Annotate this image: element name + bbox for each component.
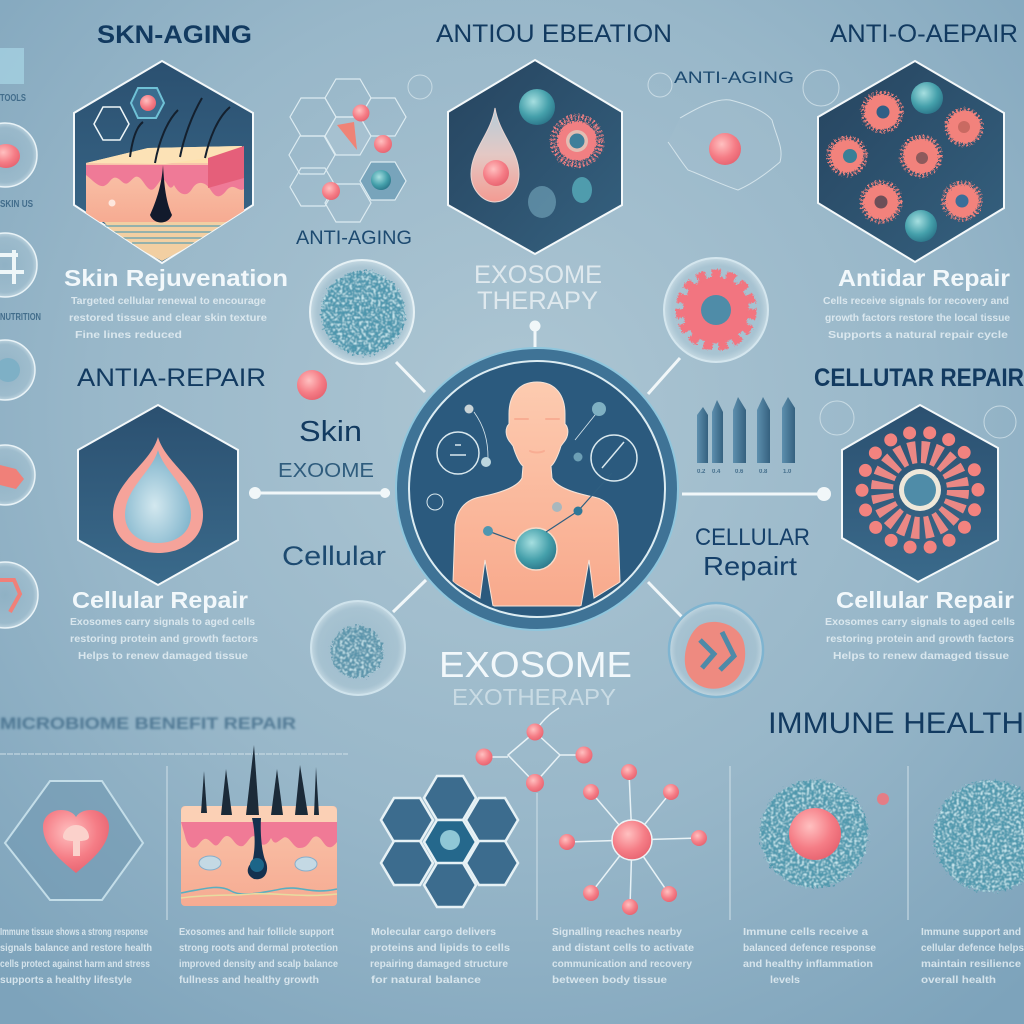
text block: bottom 5: levels (770, 974, 800, 986)
heading: immune health: IMMUNE HEALTH (768, 707, 1024, 740)
panel: small cell lower left (311, 601, 405, 695)
icon: immune cell with red core (760, 780, 889, 888)
heading: anti-oxidation: ANTIOU EBEATION (436, 20, 672, 48)
text block: skin rejuvenation: Fine lines reduced (75, 329, 182, 341)
vial labels: 1.0 (783, 469, 792, 475)
cell nuclei (843, 82, 970, 242)
text block: skin rejuvenation: Targeted cellular renewal to encourage (71, 295, 266, 307)
text block: antidar repair: growth factors restore the local tissue (825, 312, 1010, 324)
panel: heart icon (5, 781, 143, 900)
heading: antidar repair: Antidar Repair (838, 265, 1010, 291)
icon: water drop (113, 437, 203, 553)
vial labels: 0.2 (697, 469, 706, 475)
icon: immune cell teal (934, 780, 1024, 892)
floating bubbles (427, 410, 637, 510)
face (515, 419, 559, 452)
cellular label: Cellular (282, 541, 386, 571)
text block: cellular repair left: Exosomes carry signals to aged cells (70, 616, 255, 628)
icon: spiky cells (829, 93, 981, 221)
text block: bottom 4: between body tissue (552, 974, 667, 986)
heart (43, 810, 109, 873)
text block: bottom 1: cells protect against harm and stress (0, 958, 150, 970)
text labels left of centre (278, 370, 386, 571)
text block: bottom 3: Molecular cargo delivers (371, 926, 496, 938)
text block: bottom 1: signals balance and restore health (0, 942, 152, 954)
text block: bottom 2: strong roots and dermal protection (179, 942, 338, 954)
text block: cellular repair right (825, 616, 1015, 662)
vial labels (697, 469, 792, 475)
panel: central figure circle (396, 348, 678, 630)
icon: molecular star (559, 764, 707, 915)
panel: vials (697, 397, 795, 475)
heading: anti-repair top right: ANTI-O-AEPAIR (830, 20, 1018, 48)
icon: spiky red cell (553, 117, 601, 165)
heading: skin rejuvenation: Skin Rejuvenation (64, 265, 288, 291)
panel: left edge column: NUTRITION (0, 312, 41, 323)
icon: floating red ball (297, 370, 327, 400)
text block: antidar repair: Supports a natural repair cycle (828, 329, 1008, 341)
text block: bottom 6: Immune support and (921, 926, 1021, 938)
text block: bottom 1: supports a healthy lifestyle (0, 974, 132, 986)
panel: red squiggle lower right (669, 603, 763, 697)
text block: cellular repair left: Helps to renew damaged tissue (78, 650, 248, 662)
panel: spiky ring hexagon right (842, 405, 998, 582)
dividers (0, 754, 908, 920)
panel: left edge column: SKIN US (0, 199, 33, 210)
text block: bottom 3 (370, 926, 510, 986)
heading: cellular repair right: Cellular Repair (836, 587, 1014, 613)
panel: hexagon lattice (289, 79, 406, 222)
heading: anti-aging under lattice: ANTI-AGING (296, 228, 412, 249)
faint cells (572, 177, 592, 203)
icon: ring cell (862, 432, 978, 548)
heading: anti-repair left: ANTIA-REPAIR (77, 364, 266, 392)
heading: cellular repair centre-right (695, 524, 810, 581)
text block: antidar repair (823, 295, 1010, 341)
panel: left edge column: TOOLS (0, 93, 26, 104)
text block: cellular repair left (70, 616, 258, 662)
icon: skin cross-section (86, 146, 244, 261)
text block: bottom 6: maintain resilience (921, 958, 1021, 970)
skin label: Skin (299, 416, 362, 448)
vial labels: 0.8 (759, 469, 768, 475)
hexagon small outlines (94, 107, 129, 140)
faint ring icons (408, 70, 1016, 438)
panel: honeycomb (381, 776, 518, 907)
panel: red cell in glass circle (664, 258, 768, 362)
text block: bottom 3: for natural balance (371, 974, 481, 986)
text block: bottom 1 (0, 926, 152, 986)
text block: antidar repair: Cells receive signals for recovery and (823, 295, 1009, 307)
panel: droplet hexagon left (78, 405, 238, 585)
panel: cell cluster hexagon top right (818, 61, 1004, 262)
heading: blurred bottom left: MICROBIOME BENEFIT REPAIR (0, 714, 296, 733)
text block: bottom 4 (552, 926, 694, 986)
text block: bottom 6: overall health (921, 974, 996, 986)
cell in centre (440, 830, 460, 850)
icon: teal sphere (519, 89, 555, 125)
text block: bottom 2 (179, 926, 338, 986)
vial labels: 0.6 (735, 469, 744, 475)
icon: droplet (471, 108, 519, 202)
heading: small anti-aging: ANTI-AGING (674, 68, 794, 87)
text block: bottom 4: communication and recovery (552, 958, 692, 970)
hairs (201, 745, 319, 815)
text block: bottom 4: and distant cells to activate (552, 942, 694, 954)
heading: cellular repair centre-right: Repairt (703, 551, 798, 581)
text block: bottom 5 (743, 926, 876, 986)
text block: bottom 6 (921, 926, 1024, 986)
heading: exosome therapy top: THERAPY (477, 287, 598, 315)
heading: exosome therapy top (474, 261, 602, 315)
text block: bottom 2: improved density and scalp balance (179, 958, 338, 970)
text block: skin rejuvenation: restored tissue and clear skin texture (69, 312, 267, 324)
text block: bottom 2: fullness and healthy growth (179, 974, 319, 986)
icon: molecular diamond (476, 708, 592, 792)
text block: skin rejuvenation (69, 295, 267, 341)
human figure (453, 382, 620, 606)
panel: droplet hexagon top centre (448, 60, 622, 254)
icon: anti-aging glass cell (668, 100, 781, 190)
heading: exosome therapy lower: EXOSOME (439, 644, 632, 685)
text block: cellular repair right: Helps to renew damaged tissue (833, 650, 1009, 662)
text block: cellular repair right: restoring protein and growth factors (826, 633, 1014, 645)
text block: cellular repair left: restoring protein and growth factors (70, 633, 258, 645)
heading: exosome therapy lower (439, 644, 632, 710)
strata (181, 887, 337, 894)
text block: cellular repair right: Exosomes carry signals to aged cells (825, 616, 1015, 628)
exosome on chest (515, 528, 557, 570)
connectors (249, 320, 831, 617)
sebaceous glands (199, 856, 221, 870)
heading: skin aging: SKN-AGING (97, 21, 252, 49)
panel: left edge column (0, 48, 41, 628)
panel: teal cell in glass circle (310, 260, 414, 364)
text block: bottom 4: Signalling reaches nearby (552, 926, 682, 938)
heading: exosome therapy top: EXOSOME (474, 261, 602, 289)
text block: bottom 3: repairing damaged structure (370, 958, 508, 970)
panel: skin rejuvenation hexagon (74, 61, 253, 263)
panel: skin block bottom (181, 745, 337, 906)
hairs (130, 98, 230, 163)
exosome label: EXOOME (278, 460, 374, 482)
text block: bottom 5: Immune cells receive a (743, 926, 868, 938)
vial labels: 0.4 (712, 469, 721, 475)
text block: bottom 5: and healthy inflammation (743, 958, 873, 970)
text block: bottom 5: balanced defence response (743, 942, 876, 954)
text block: bottom 2: Exosomes and hair follicle support (179, 926, 334, 938)
heading: cellular repair centre-right: CELLULAR (695, 524, 810, 551)
heading: cellular repair left: Cellular Repair (72, 587, 248, 613)
heading: exosome therapy lower: EXOTHERAPY (452, 684, 616, 710)
text block: bottom 3: proteins and lipids to cells (370, 942, 510, 954)
text block: bottom 1: Immune tissue shows a strong response (0, 926, 148, 938)
